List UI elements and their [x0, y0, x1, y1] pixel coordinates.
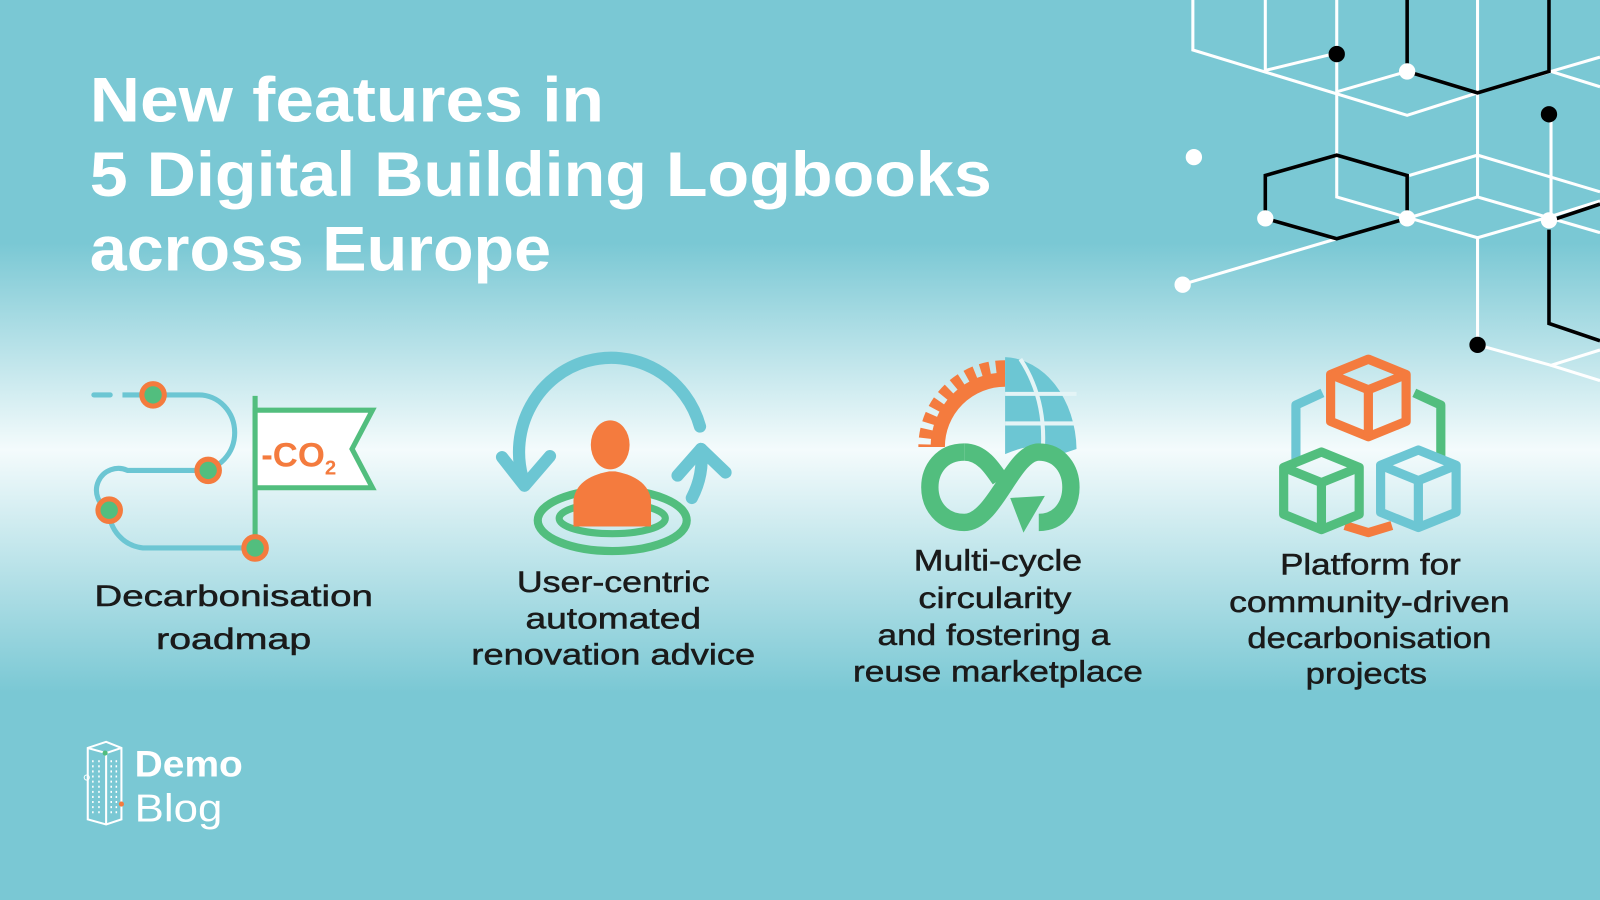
title: 5 Digital Building Logbooks [90, 140, 992, 210]
title: across Europe [90, 214, 551, 284]
title: New features in [90, 65, 604, 135]
label: circularity: and fostering a [878, 619, 1111, 652]
icon: renovation advice [502, 358, 726, 551]
label: decarbonisation roadmap: roadmap [156, 623, 311, 656]
label: community projects: projects [1306, 658, 1427, 691]
network mesh decoration [1174, 0, 1600, 381]
label: community projects: Platform for [1280, 548, 1461, 581]
label: renovation advice: User-centric [517, 566, 710, 599]
label: renovation advice [471, 566, 755, 671]
logo: Demo Blog: Blog [135, 787, 222, 830]
icon: decarbonisation roadmap: 2 [325, 457, 336, 479]
label: community projects: community-driven [1229, 586, 1510, 619]
icon: decarbonisation roadmap [94, 384, 372, 559]
label: renovation advice: automated [526, 603, 701, 636]
title [90, 65, 992, 284]
icon: decarbonisation roadmap: -CO [261, 436, 325, 474]
logo: Demo Blog [84, 742, 243, 830]
label: community projects [1229, 548, 1510, 691]
label: circularity: Multi-cycle [914, 544, 1082, 577]
icon: circularity [926, 357, 1080, 533]
label: circularity: circularity [918, 582, 1072, 615]
logo: Demo Blog: Demo [135, 744, 243, 785]
label: decarbonisation roadmap: Decarbonisation [94, 580, 373, 613]
label: community projects: decarbonisation [1247, 622, 1491, 655]
label: circularity [853, 544, 1143, 689]
label: circularity: reuse marketplace [853, 656, 1143, 689]
icon: community cubes [1284, 359, 1456, 533]
label: renovation advice: renovation advice [471, 638, 755, 671]
label: decarbonisation roadmap [94, 580, 373, 656]
